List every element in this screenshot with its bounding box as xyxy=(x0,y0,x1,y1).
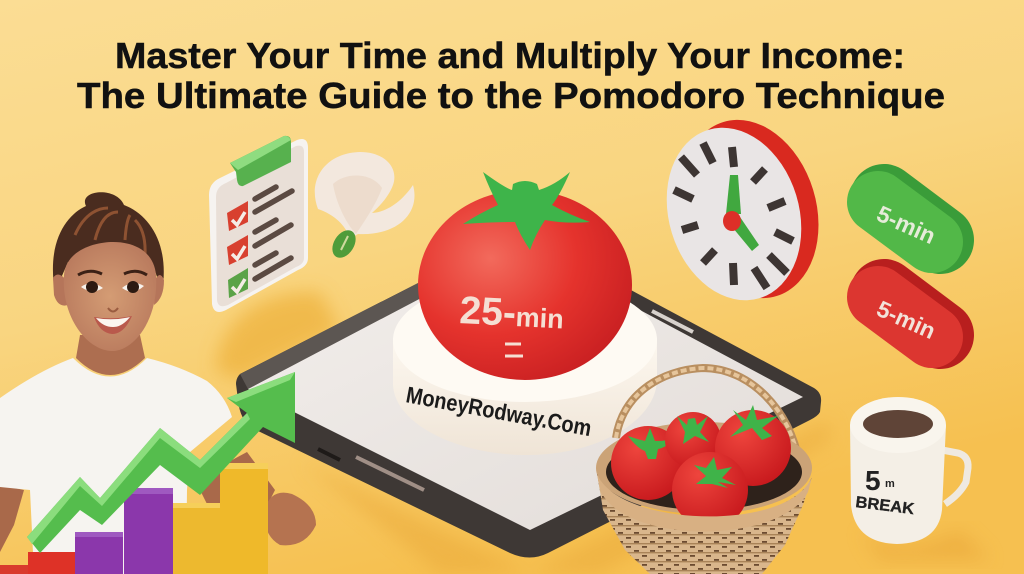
white hook ornament xyxy=(315,152,414,262)
ears xyxy=(53,274,164,306)
wall clock xyxy=(646,103,840,317)
coffee mug xyxy=(850,397,968,544)
wicker basket of tomatoes xyxy=(596,368,812,574)
growth bar chart xyxy=(0,463,268,574)
platform brand text: MoneyRodway.Com xyxy=(404,381,594,441)
mug text: 5 xyxy=(865,465,881,496)
growth arrow xyxy=(27,372,295,553)
right arm and hand xyxy=(195,452,275,520)
red pill: 5-min: 5-min xyxy=(873,295,940,344)
checklist xyxy=(209,136,308,312)
face xyxy=(64,242,156,351)
tomato: right xyxy=(715,405,791,486)
tablet xyxy=(236,233,821,558)
nose xyxy=(108,308,118,312)
title xyxy=(77,35,945,116)
title: The Ultimate Guide to the Pomodoro Technique xyxy=(77,75,945,116)
clock tick marks xyxy=(674,143,793,288)
checkbox rows xyxy=(227,201,248,298)
timer label: 25-min xyxy=(459,289,565,337)
mug text xyxy=(855,465,916,518)
mug text: BREAK xyxy=(855,494,916,518)
green pill: 5-min: 5-min xyxy=(873,200,940,249)
smile xyxy=(94,316,132,334)
woman character xyxy=(0,192,316,574)
neck xyxy=(76,335,145,375)
left arm xyxy=(0,485,24,552)
clock hands xyxy=(726,175,741,214)
hair xyxy=(53,192,164,292)
tomato stem and leaves xyxy=(463,172,590,250)
tomato timer xyxy=(418,172,632,380)
timer platform xyxy=(393,278,657,455)
tomato: left xyxy=(611,426,685,500)
eyes and brows xyxy=(78,271,147,293)
checklist text lines xyxy=(255,187,292,279)
tomato: back xyxy=(665,412,721,468)
shirt xyxy=(0,358,232,574)
tomato: front xyxy=(672,452,748,528)
basket body xyxy=(597,473,812,574)
mug text: m xyxy=(885,478,895,490)
title: Master Your Time and Multiply Your Income: xyxy=(115,35,905,76)
